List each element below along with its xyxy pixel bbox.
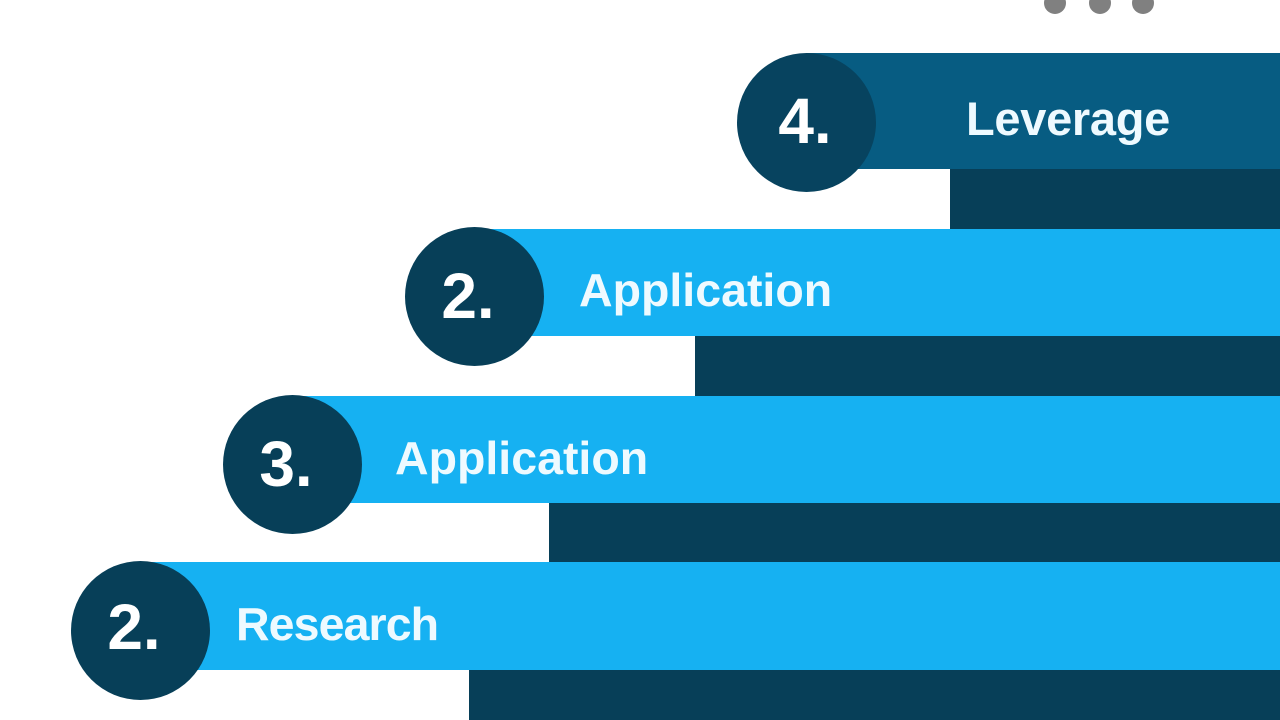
menu dots icon: [1044, 0, 1154, 14]
step bar: 3 Application: [223, 395, 1280, 534]
badge number 2: [71, 561, 210, 700]
badge number 2: 2.: [441, 260, 495, 332]
label Application: Application: [395, 432, 648, 484]
step riser 3: [695, 335, 1280, 397]
step riser 4: [950, 168, 1280, 230]
badge number 2: [405, 227, 544, 366]
step bar: 2 Research: [71, 561, 1280, 700]
badge number 3: 3.: [259, 428, 313, 500]
badge number 4: [737, 53, 876, 192]
badge number 4: 4.: [778, 85, 832, 157]
step riser 1: [469, 669, 1280, 720]
step bar: 4 Leverage: [737, 53, 1280, 192]
label Application: Application: [579, 264, 832, 316]
badge number 2: 2.: [107, 591, 161, 663]
step riser 2: [549, 502, 1280, 564]
badge number 3: [223, 395, 362, 534]
label Research: Research: [236, 598, 438, 650]
label Leverage: Leverage: [966, 92, 1170, 145]
step bar: 2 Application: [405, 227, 1280, 366]
